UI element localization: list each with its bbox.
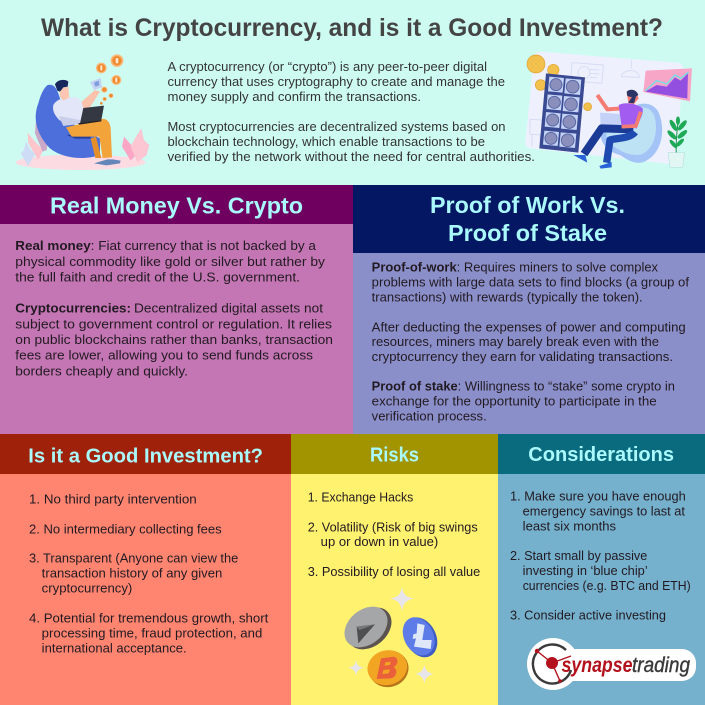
intro text: money supply and confirm the transactions. xyxy=(168,89,421,104)
text: proof of stake xyxy=(372,379,675,424)
text: real money: physical commodity like gold or silver but rather by xyxy=(15,254,326,269)
text: mining economics: cryptocurrency they earn for validating transactions. xyxy=(372,349,673,364)
text: proof of stake: Proof of stake xyxy=(372,379,458,394)
list: benefits: 2. No intermediary collecting fees xyxy=(29,521,222,536)
heading: Considerations xyxy=(528,444,674,466)
text: proof of stake: exchange for the opportunity to participate in the xyxy=(372,394,657,409)
panel: considerations xyxy=(498,434,705,705)
list: benefits: 3. Transparent (Anyone can view the xyxy=(29,551,238,566)
panel: intro xyxy=(0,0,705,185)
panel: is it a good investment xyxy=(0,434,291,705)
list: risks: 3. Possibility of losing all value xyxy=(308,564,480,579)
text: mining economics: resources, miners may barely break even with the xyxy=(372,334,659,349)
intro text xyxy=(168,59,535,164)
text: proof of work: transactions) with rewards (typically the token). xyxy=(372,290,643,305)
list: considerations: 3. Consider active investing xyxy=(510,608,666,623)
heading: Proof of Work Vs. xyxy=(430,192,625,218)
icon: investor on beanbag with laptop and coins xyxy=(16,54,149,170)
intro text: verified by the network without the need for central authorities. xyxy=(168,149,535,164)
list: considerations: currencies (e.g. BTC and ETH) xyxy=(523,578,691,593)
text: real money: : Fiat currency that is not backed by a xyxy=(91,238,317,253)
list: benefits xyxy=(29,491,269,655)
intro text: blockchain technology, which enable transactions to be xyxy=(168,134,485,149)
panel: proof of work vs proof of stake xyxy=(353,185,705,434)
text: real money: the full faith and credit of the U.S. government. xyxy=(15,270,300,285)
intro text: A cryptocurrency (or “crypto”) is any peer-to-peer digital xyxy=(168,59,487,74)
list: risks: 1. Exchange Hacks xyxy=(308,490,413,505)
logo: synapsetrading: synapse xyxy=(562,654,633,677)
list: considerations: 2. Start small by passive xyxy=(510,548,647,563)
list: considerations: least six months xyxy=(523,518,616,533)
heading: Risks xyxy=(370,445,419,467)
list: benefits: processing time, fraud protection, and xyxy=(42,625,262,640)
logo: synapsetrading: trading xyxy=(632,654,690,677)
text: cryptocurrencies: Cryptocurrencies: xyxy=(15,301,131,316)
panel: risks xyxy=(291,434,498,705)
list: risks xyxy=(308,490,480,579)
panel: real money vs crypto xyxy=(0,185,353,434)
text: cryptocurrencies xyxy=(15,301,333,379)
text: cryptocurrencies: Decentralized digital assets not xyxy=(134,301,323,316)
text: proof of stake: verification process. xyxy=(372,409,487,424)
list: considerations xyxy=(510,489,691,623)
heading: Proof of Stake xyxy=(448,220,607,246)
text: proof of work: Proof-of-work xyxy=(372,260,458,275)
text: proof of work xyxy=(372,260,689,305)
text: cryptocurrencies: subject to government control or regulation. It relies xyxy=(15,316,332,331)
logo: synapsetrading xyxy=(527,638,696,690)
list: considerations: investing in ‘blue chip’ xyxy=(523,563,648,578)
text: proof of work: : Requires miners to solve complex xyxy=(457,260,659,275)
list: considerations: emergency savings to last at xyxy=(523,504,685,519)
text: cryptocurrencies: on public blockchains rather than banks, transaction xyxy=(15,332,333,347)
list: benefits: international acceptance. xyxy=(42,640,187,655)
intro text: Most cryptocurrencies are decentralized systems based on xyxy=(168,119,506,134)
text: real money xyxy=(15,238,326,285)
text: mining economics: After deducting the expenses of power and computing xyxy=(372,319,686,334)
text: mining economics xyxy=(372,319,686,364)
list: benefits: 1. No third party intervention xyxy=(29,491,197,506)
text: proof of stake: : Willingness to “stake” some crypto in xyxy=(458,379,675,394)
text: real money: Real money xyxy=(15,238,92,253)
list: benefits: cryptocurrency) xyxy=(42,581,132,596)
icon: miner with rig, chart and plant xyxy=(525,52,692,169)
icon: crypto coins with sparkles xyxy=(336,586,444,692)
list: risks: 2. Volatility (Risk of big swings xyxy=(308,519,478,534)
text: cryptocurrencies: fees are lower, allowing you to send funds across xyxy=(15,348,313,363)
text: cryptocurrencies: borders cheaply and quickly. xyxy=(15,364,188,379)
list: risks: up or down in value) xyxy=(321,534,438,549)
list: benefits: transaction history of any given xyxy=(42,566,222,581)
heading xyxy=(430,192,625,246)
intro text: currency that uses cryptography to create and manage the xyxy=(168,74,505,89)
text: proof of work: problems with large data sets to find blocks (a group of xyxy=(372,275,689,290)
list: considerations: 1. Make sure you have enough xyxy=(510,489,686,504)
title: What is Cryptocurrency, and is it a Good Investment? xyxy=(41,14,663,42)
heading: Is it a Good Investment? xyxy=(28,445,263,467)
list: benefits: 4. Potential for tremendous growth, short xyxy=(29,610,269,625)
heading: Real Money Vs. Crypto xyxy=(50,192,303,218)
